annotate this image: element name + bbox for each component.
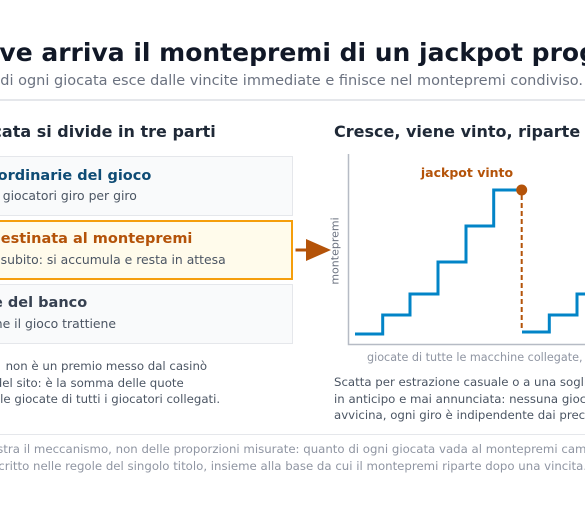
chart axes [348, 154, 585, 344]
footnote [0, 442, 585, 473]
panel: quota destinata [0, 220, 293, 280]
jackpot point [516, 184, 527, 196]
footer rule [0, 434, 585, 435]
chart line: growth steps [355, 190, 522, 334]
panel: vincite ordinarie [0, 156, 293, 216]
right section heading: Cresce, viene vinto, riparte [334, 122, 580, 141]
arrow [296, 239, 331, 261]
chart line: restart steps [522, 294, 585, 332]
panel: margine del banco [0, 284, 293, 344]
left explanatory note [0, 359, 220, 406]
drop line [521, 195, 523, 330]
jackpot label: jackpot vinto [420, 165, 514, 180]
y axis label: montepremi [328, 217, 342, 285]
right explanatory note [334, 375, 585, 422]
header rule [0, 99, 585, 100]
